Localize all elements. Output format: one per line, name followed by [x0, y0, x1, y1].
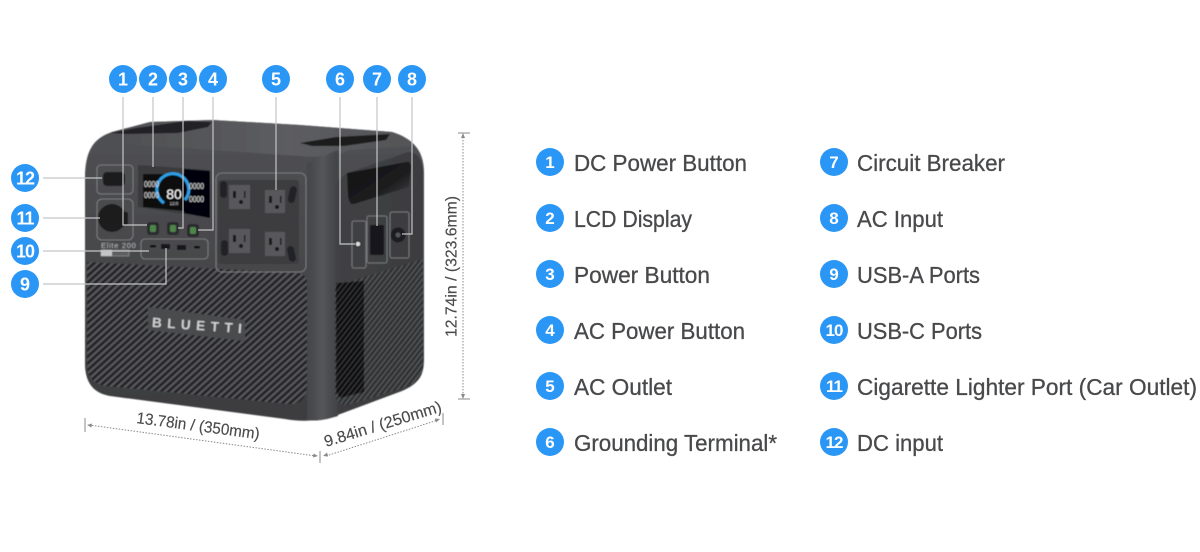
side port panels: [352, 212, 409, 268]
brand name: BLUETTI: [152, 315, 242, 336]
cigarette port panel: [97, 199, 133, 240]
status text: 12:0: [170, 201, 179, 206]
gauge ring: [157, 174, 189, 203]
legend: AC Input: AC Input: [857, 206, 944, 232]
legend: DC Power Button: 1: [545, 153, 555, 172]
legend: USB-C Ports: USB-C Ports: [857, 318, 982, 344]
legend: Grounding Terminal: 6: [545, 433, 555, 452]
legend: AC Input: 8: [829, 209, 839, 228]
side carrying handle: [347, 162, 411, 204]
side panel: [335, 152, 423, 405]
legend: Cigarette Lighter Port: Cigarette Lighter Port (Car Outlet): [857, 374, 1197, 400]
brand plate: [148, 307, 245, 341]
leader lines: [43, 97, 412, 284]
legend: USB-C Ports: 10: [826, 321, 843, 340]
left number badges: 12: [16, 168, 35, 188]
legend: AC Outlet: AC Outlet: [574, 374, 673, 400]
top surface: [104, 120, 414, 157]
legend: DC Power Button: DC Power Button: [574, 150, 747, 176]
legend: AC Outlet: [536, 372, 673, 400]
unit body silhouette: [85, 120, 424, 421]
right top handle recess: [300, 134, 390, 146]
left number badges: [11, 164, 39, 298]
model label: Elite 200: [101, 241, 136, 250]
power station product illustration: [85, 120, 424, 421]
top number badges: 2: [148, 70, 158, 90]
side vent: [336, 281, 364, 398]
left number badges: 9: [20, 274, 30, 294]
legend: LCD Display: [536, 204, 692, 232]
readouts right lower: 0000: [189, 194, 204, 204]
control buttons: [147, 222, 199, 237]
readouts left: 0000: [144, 179, 159, 189]
legend: AC Input: [820, 204, 944, 232]
left number badges: 10: [16, 242, 35, 262]
legend: AC Outlet: 5: [545, 377, 555, 396]
legend: USB-A Ports: USB-A Ports: [857, 262, 980, 288]
LCD display: [138, 165, 210, 218]
legend: USB-A Ports: [820, 260, 980, 288]
left top handle recess: [110, 121, 212, 134]
legend: Grounding Terminal: Grounding Terminal*: [574, 430, 777, 456]
height dimension: [444, 133, 470, 399]
left number badges: 11: [16, 208, 35, 228]
top number badges: 8: [407, 70, 417, 90]
depth label: 9.84in / (250mm): [322, 399, 444, 451]
top number badges: 3: [178, 70, 188, 90]
depth dimension: [322, 399, 444, 456]
legend: AC Power Button: 4: [545, 321, 555, 340]
top number badges: 5: [271, 70, 281, 90]
legend: LCD Display: LCD Display: [574, 206, 692, 232]
legend: DC input: 12: [826, 433, 843, 452]
readouts right: 0000: [189, 181, 204, 191]
USB ports panel: [141, 239, 208, 259]
top number badges: [109, 65, 426, 93]
legend column 2: [820, 148, 1197, 456]
legend: DC input: [820, 428, 944, 456]
legend: LCD Display: 2: [545, 209, 555, 228]
width label: 13.78in / (350mm): [135, 410, 261, 443]
model label: [101, 241, 136, 256]
top number badges: 4: [208, 70, 218, 90]
legend: Circuit Breaker: 7: [829, 153, 839, 172]
DC input panel: [97, 165, 133, 194]
legend: Circuit Breaker: Circuit Breaker: [857, 150, 1005, 176]
front stripes: [87, 262, 307, 404]
corner edge column: [307, 150, 338, 421]
legend: Power Button: Power Button: [574, 262, 710, 288]
legend: DC input: DC input: [857, 430, 944, 456]
legend: Cigarette Lighter Port: 11: [826, 377, 843, 396]
width dimension: [85, 410, 320, 463]
legend: Power Button: 3: [545, 265, 555, 284]
height label: 12.74in / (323.6mm): [444, 196, 460, 337]
top number badges: 7: [372, 70, 382, 90]
top number badges: 1: [118, 70, 128, 90]
legend column 1: [536, 148, 777, 456]
legend: USB-C Ports: [820, 316, 982, 344]
legend: USB-A Ports: 9: [829, 265, 839, 284]
battery percent: 80: [166, 186, 182, 202]
top number badges: 6: [335, 70, 345, 90]
AC outlets panel: [216, 173, 306, 272]
side panel stripes: [335, 259, 423, 405]
readouts left lower: 0000: [144, 190, 159, 200]
legend: AC Power Button: AC Power Button: [574, 318, 745, 344]
